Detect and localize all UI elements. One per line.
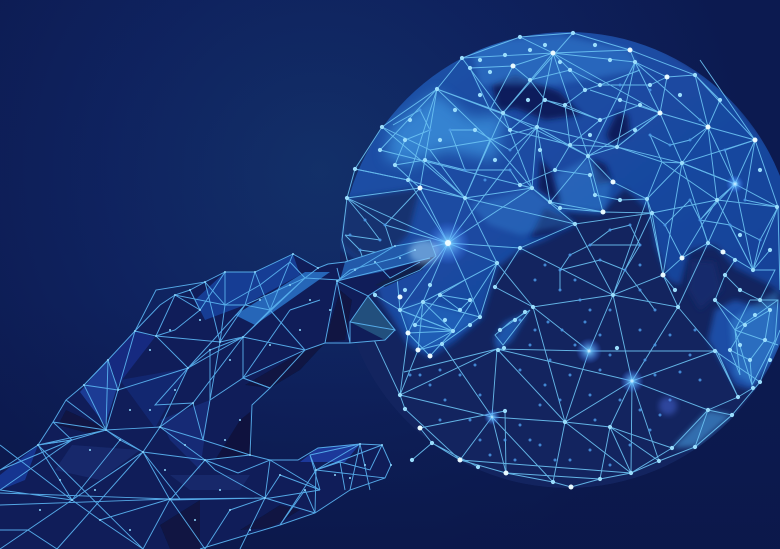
globe network lines <box>342 33 780 487</box>
hand silhouette <box>0 240 436 549</box>
globe node dots, small scattered <box>350 85 760 465</box>
globe node dots, medium <box>347 33 777 482</box>
hand <box>0 240 451 549</box>
fingertip glow <box>409 240 451 264</box>
hand facets <box>0 240 436 549</box>
hand network lines <box>0 240 436 549</box>
glowing star nodes <box>426 175 744 425</box>
globe <box>330 25 780 488</box>
globe node dots, bright <box>400 50 755 487</box>
hand small dots <box>38 246 415 530</box>
globe sphere and land masses <box>330 25 780 488</box>
